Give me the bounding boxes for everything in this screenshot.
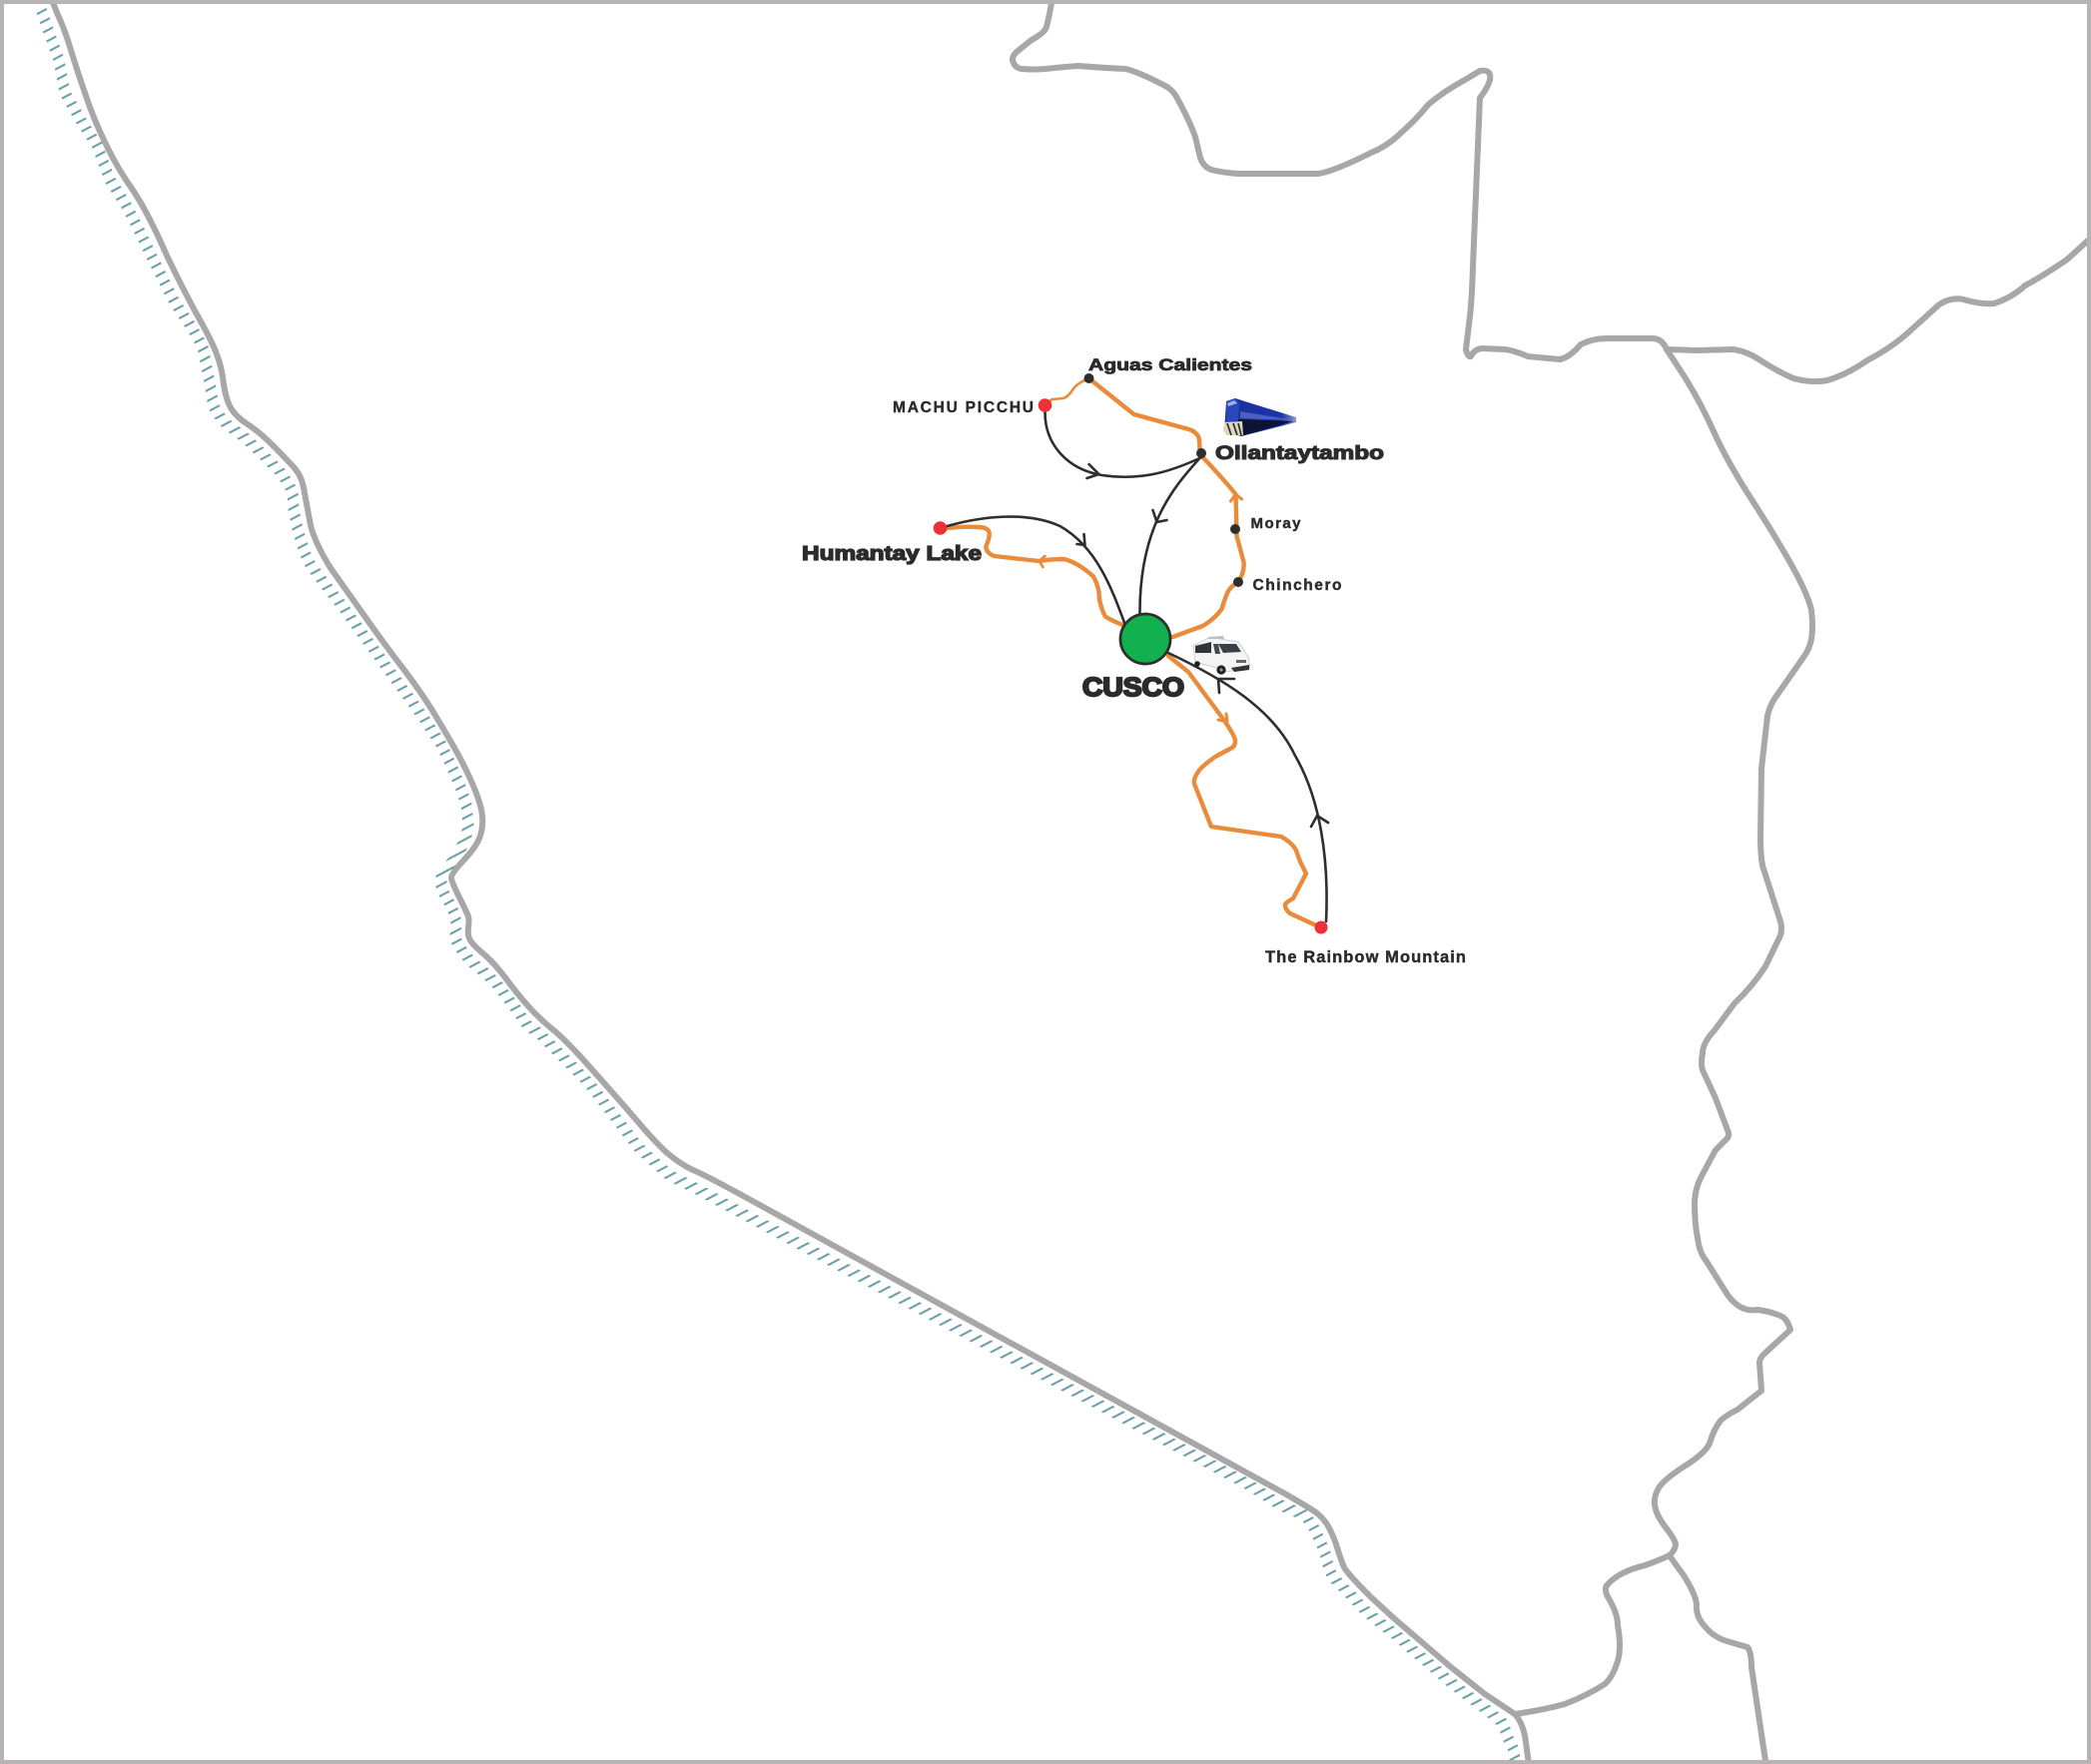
northern border [1013,3,1667,359]
coastline [52,0,1529,1764]
route arrowhead: Humantay Lake [1039,556,1045,567]
southern east branch border [1671,1557,1765,1761]
arrowhead: Humantay Lake return [1076,534,1084,545]
route: Cusco to Humantay Lake [947,527,1122,625]
label: Moray: Moray [1250,515,1301,532]
route: Cusco to The Rainbow Mountain [1168,656,1316,925]
coastal hatching [41,9,1515,1760]
return: Ollantaytambo to Cusco [1139,459,1198,616]
return: Machu Picchu to Ollantaytambo [1045,412,1202,477]
route: Aguas Calientes to Machu Picchu [1045,378,1088,405]
location: Rainbow Mountain marker [1314,920,1328,934]
location: Machu Picchu marker [1039,398,1051,412]
label: Aguas Calientes: Aguas Calientes [1088,355,1252,374]
arrowhead: Machu Picchu return [1086,464,1098,478]
route: Ollantaytambo to Aguas Calientes [1088,378,1200,449]
icon: van [1193,636,1250,675]
arrowhead: Rainbow Mountain return [1311,816,1328,827]
location: Cusco marker [1120,614,1170,664]
label: Ollantaytambo: Ollantaytambo [1215,442,1384,464]
location: Moray marker [1230,524,1240,534]
eastern border [1655,349,1812,1555]
location: Humantay Lake marker [934,521,947,535]
location: Aguas Calientes marker [1084,373,1094,383]
return: Humantay Lake to Cusco [947,517,1124,624]
return: Rainbow Mountain to Cusco [1168,653,1327,921]
label: Cusco: CUSCO [1082,672,1184,702]
location: Chinchero marker [1233,577,1243,587]
route: Cusco to Ollantaytambo [1172,457,1244,637]
arrowhead: Ollantaytambo return [1152,510,1166,522]
route arrowhead: Rainbow Mountain [1218,714,1227,722]
label: Humantay Lake: Humantay Lake [802,542,982,565]
icon: train [1223,398,1296,436]
southern west branch border [1515,1555,1670,1714]
location: Ollantaytambo marker [1196,448,1206,458]
label: Machu Picchu: MACHU PICCHU [893,399,1034,416]
label: The Rainbow Mountain: The Rainbow Mountain [1265,948,1466,966]
label: Chinchero: Chinchero [1252,577,1342,594]
orange routes [947,378,1316,925]
route arrowhead: Ollantaytambo [1230,494,1242,501]
north-eastern border [1667,240,2089,381]
arrowhead: Cusco return [1218,679,1234,693]
black return arcs [947,412,1328,921]
